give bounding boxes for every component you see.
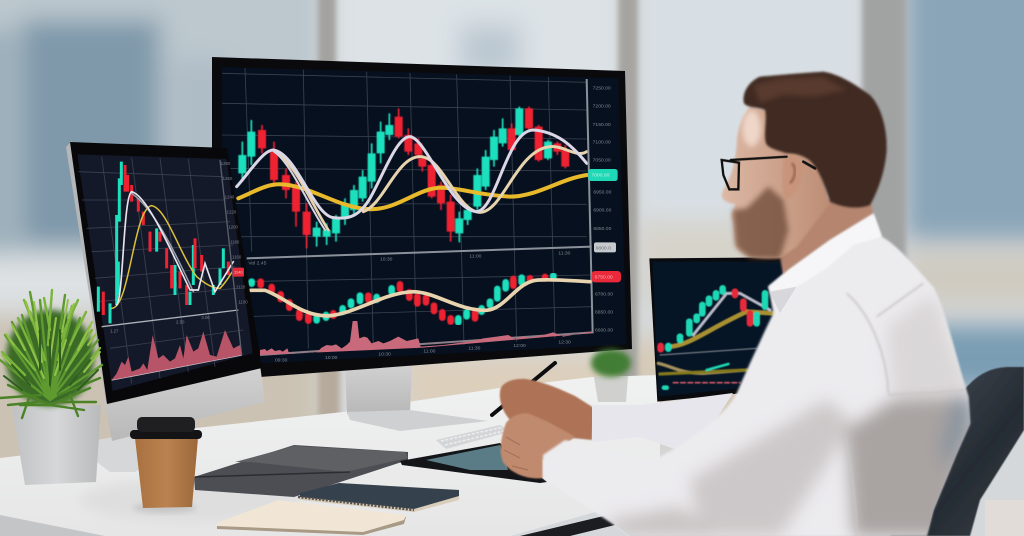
shirt: torso and front sleeve <box>543 213 970 536</box>
main monitor bezel <box>212 57 632 380</box>
price axis labels: 10:00 <box>325 355 338 361</box>
laptop screen <box>653 262 783 397</box>
price axis labels: 7050.00 <box>593 158 611 164</box>
price axis labels: 12:00 <box>513 343 526 349</box>
price axis labels: 6950.00 <box>593 190 612 196</box>
lower panel trend line <box>251 280 590 316</box>
hair highlight <box>753 77 847 103</box>
left price axis labels: 1260 <box>223 176 233 181</box>
pen <box>492 363 555 415</box>
front hand knuckles <box>504 437 528 470</box>
rear shirt sleeve <box>592 393 733 452</box>
neck <box>780 200 873 277</box>
left moving averages <box>112 192 233 308</box>
axes and separators <box>247 79 593 355</box>
price axis labels: 11:30 <box>558 250 571 256</box>
laptop on desk, behind the trader <box>649 257 783 402</box>
left monitor stand <box>97 430 150 472</box>
left price axis labels: 1200 <box>228 224 239 229</box>
tablet folio on desk <box>194 445 408 497</box>
left separators <box>102 160 242 380</box>
small plant pot <box>594 376 628 402</box>
cup sleeve <box>135 438 198 508</box>
potted plant <box>0 290 102 485</box>
left price axis labels: 3.00 <box>201 315 210 320</box>
price axis labels: 7250.00 <box>593 86 611 92</box>
spiral notebook <box>298 483 459 512</box>
left price axis labels: 1100 <box>238 299 248 304</box>
price axis labels <box>248 86 613 364</box>
price axis labels: 7100.00 <box>593 140 611 146</box>
tablet on desk <box>400 443 547 483</box>
glasses <box>722 157 815 189</box>
beard <box>733 187 788 258</box>
laptop chart <box>658 288 773 388</box>
price axis labels: 6850.00 <box>593 226 612 232</box>
laptop bezel <box>649 257 783 402</box>
red price tag: 6750.00 <box>595 275 613 281</box>
teal price tag <box>588 169 618 181</box>
left price axis labels: 1180 <box>230 239 240 244</box>
price axis labels: 11:00 <box>469 254 482 260</box>
price axis labels: 7200.00 <box>593 104 611 110</box>
volume histogram <box>260 321 593 355</box>
price axis labels: Vol 2.45 <box>248 260 267 266</box>
left price axis labels: 2.50 <box>176 319 185 324</box>
left monitor bezel <box>70 142 262 404</box>
left monitor <box>66 141 265 472</box>
price axis labels: 10:30 <box>380 257 393 263</box>
left price axis labels: 1.27 <box>110 328 119 333</box>
right edge window frame at bottom <box>985 500 1024 536</box>
coffee cup <box>130 417 202 513</box>
shirt seams <box>845 283 965 536</box>
rear hand holding pen <box>492 363 594 440</box>
left red price tag <box>233 268 244 277</box>
price axis labels: 11:00 <box>423 348 436 354</box>
trader <box>400 72 977 536</box>
price axis labels: 6600.00 <box>595 328 613 334</box>
price axis labels: 10:30 <box>378 352 391 358</box>
hair <box>744 72 887 207</box>
left price axis labels: 1160 <box>232 254 242 259</box>
price axis labels: 7150.00 <box>593 122 611 128</box>
small plant leaves <box>591 349 631 377</box>
left price axis labels: 1120 <box>236 284 246 289</box>
price axis labels: 6700.00 <box>595 292 613 298</box>
white price tag: 6800.0 <box>596 245 611 251</box>
candlestick chart <box>242 107 565 248</box>
left monitor screen and chart <box>77 154 253 391</box>
cup lid <box>130 417 202 439</box>
left red price tag: 1140 <box>234 270 243 275</box>
red price tag <box>592 271 621 282</box>
white price tag <box>594 242 616 252</box>
rear hand <box>500 379 594 440</box>
office chair <box>890 367 1024 536</box>
left monitor aluminium chin <box>104 365 265 441</box>
desk <box>0 375 660 536</box>
teal price tag: 7000.00 <box>591 173 610 179</box>
shirt shading <box>607 293 977 536</box>
left price axis labels: 1220 <box>227 209 237 214</box>
left volume histogram <box>112 330 242 380</box>
monitor stand <box>345 362 488 431</box>
moving average lines <box>237 130 587 230</box>
left monitor silver edge <box>66 141 110 402</box>
plant pot <box>12 405 101 485</box>
price axis labels: 6650.00 <box>595 310 613 316</box>
left price axis labels: 1280 <box>221 161 231 166</box>
cream notepad <box>217 500 406 535</box>
ear <box>782 155 803 200</box>
keyboard <box>436 425 512 449</box>
inner ear <box>790 163 795 183</box>
main monitor <box>212 57 632 431</box>
price axis labels: 09:30 <box>275 358 288 364</box>
price axis labels: 6900.00 <box>593 208 612 214</box>
front hand <box>501 413 575 478</box>
price axis labels: 12:30 <box>558 340 571 346</box>
plant foliage <box>0 290 102 418</box>
left price axis labels: 1240 <box>225 194 235 199</box>
lower panel candles <box>252 276 553 322</box>
collar <box>768 213 882 313</box>
face <box>722 107 830 259</box>
left candlesticks <box>98 162 228 323</box>
main monitor screen and charts <box>222 67 627 364</box>
price axis labels: 11:30 <box>468 345 481 351</box>
forehead highlight <box>742 110 761 147</box>
left price axis labels <box>110 161 248 333</box>
background small plant <box>591 349 631 402</box>
